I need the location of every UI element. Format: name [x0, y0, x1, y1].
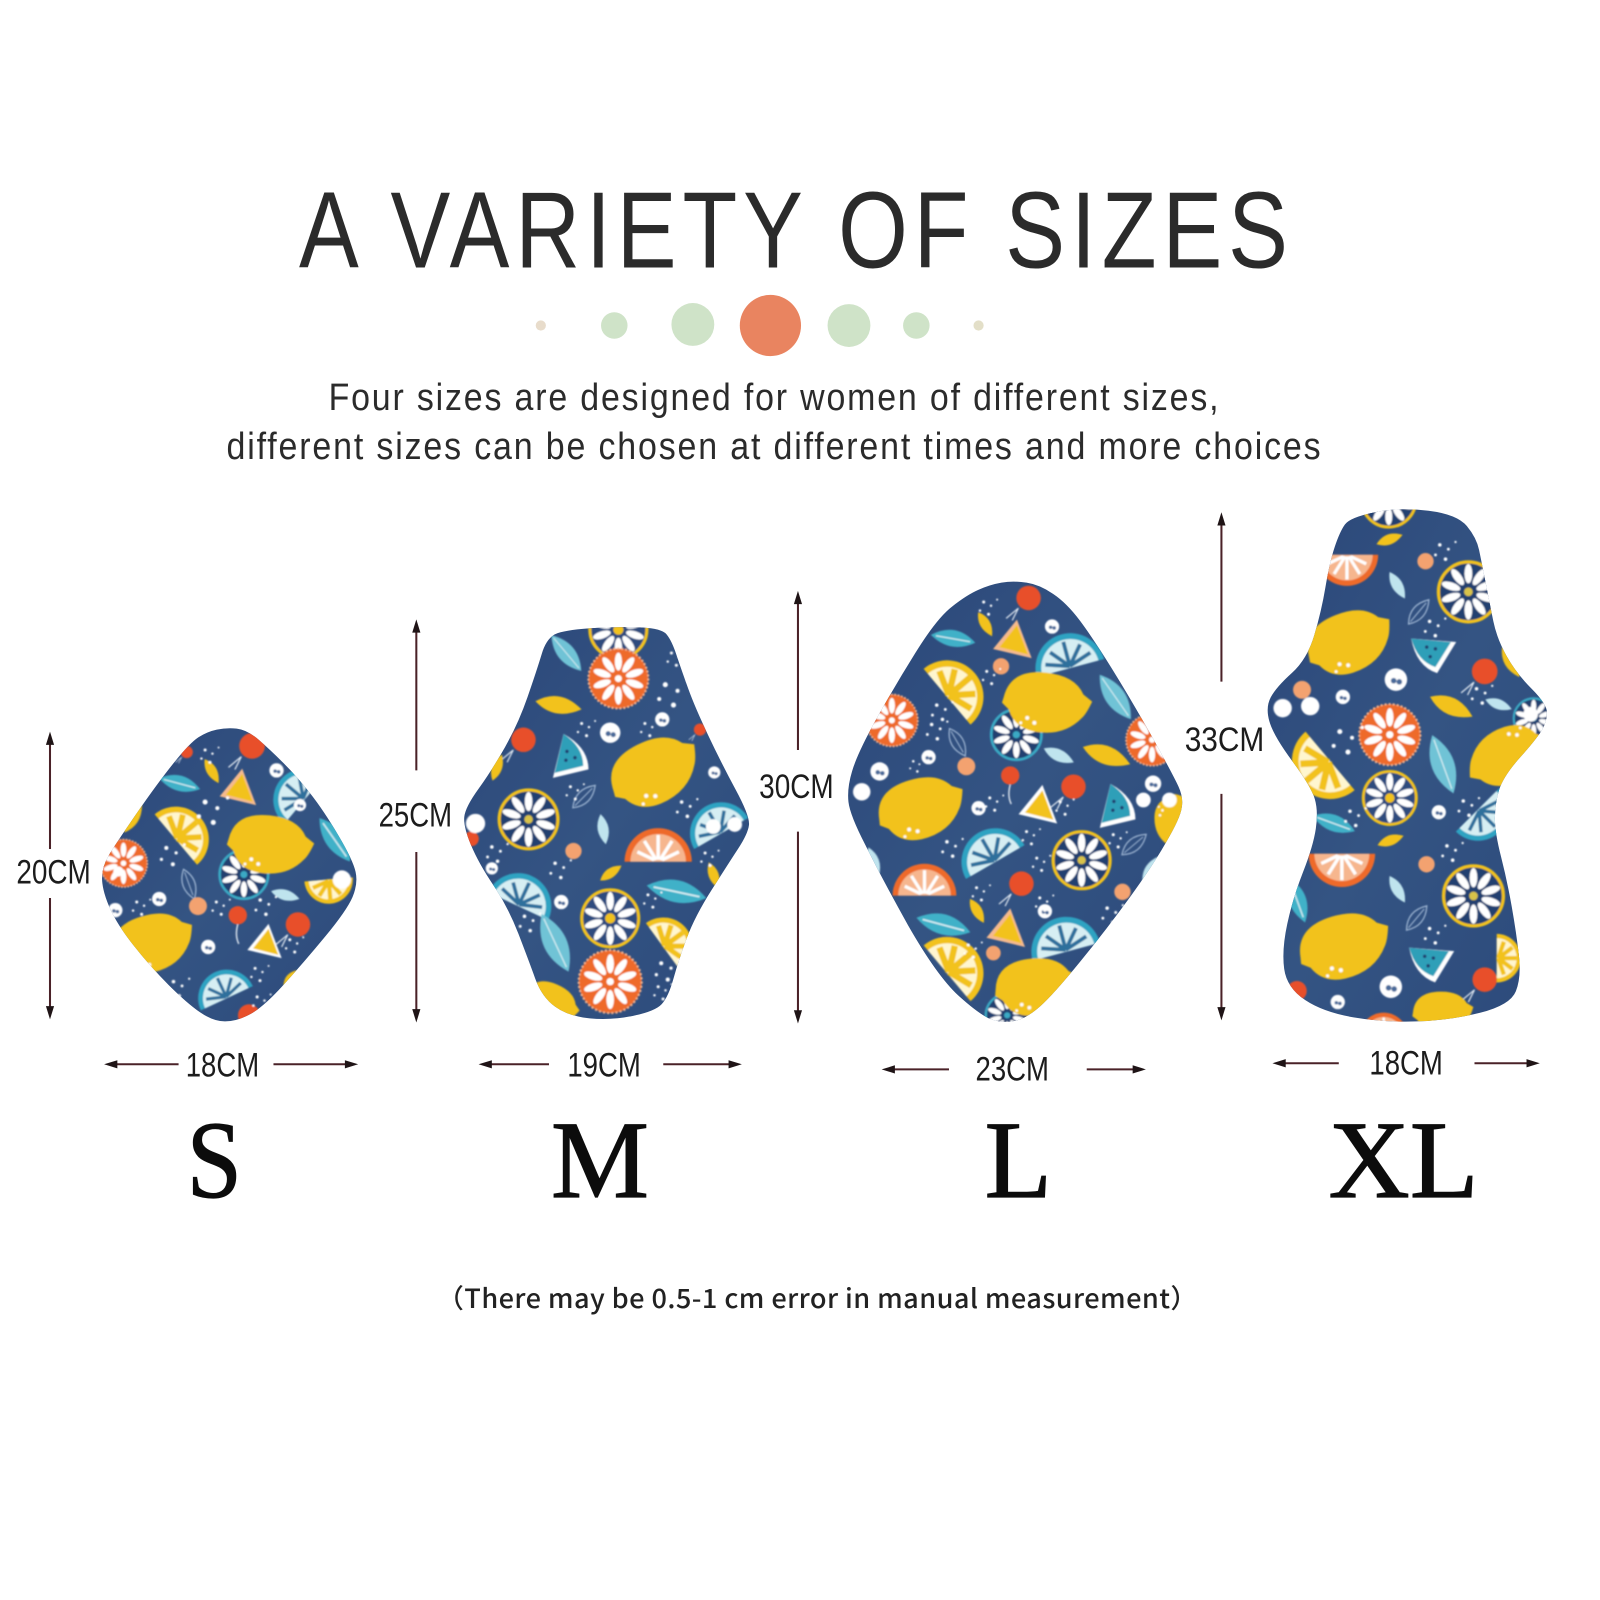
dimension: L width 23CM: 23CM	[976, 1051, 1049, 1089]
pad L outline	[848, 582, 1182, 1022]
pad: size XL	[1268, 509, 1547, 1022]
pad L fruit print	[853, 586, 1192, 1037]
dimension: L height 30CM: 30CM	[759, 768, 834, 806]
pad: size M	[464, 627, 750, 1019]
pad M outline	[464, 627, 749, 1019]
dimension: S width 18CM	[104, 1047, 358, 1085]
dimension: XL width 18CM: 18CM	[1369, 1044, 1443, 1082]
subtitle: different sizes can be chosen at different times and more choices	[227, 425, 1322, 467]
pad: size S	[100, 728, 358, 1036]
size letter L: L	[985, 1099, 1052, 1221]
dimension: XL width 18CM	[1272, 1044, 1540, 1082]
decorative dot row	[536, 295, 984, 356]
size letter S: S	[187, 1099, 242, 1221]
pad: size L	[848, 582, 1192, 1037]
dimension: S height 20CM: 20CM	[16, 854, 91, 892]
dimension: L width 23CM	[882, 1051, 1146, 1089]
size letter M: M	[551, 1099, 649, 1221]
pad XL outline	[1268, 509, 1547, 1022]
dimension: XL height 33CM	[1185, 512, 1264, 1020]
dimension: L height 30CM	[759, 591, 834, 1023]
dimension: M height 25CM	[379, 619, 452, 1022]
dimension: M width 19CM: 19CM	[567, 1047, 641, 1085]
title: A VARIETY OF SIZES	[299, 169, 1294, 290]
subtitle: Four sizes are designed for women of different sizes,	[329, 376, 1220, 418]
dimension: XL height 33CM: 33CM	[1185, 721, 1264, 759]
pad S fruit print	[100, 733, 358, 1036]
measurement note: （There may be 0.5-1 cm error in manual measurement）	[437, 1277, 1198, 1316]
dimension: S width 18CM: 18CM	[186, 1047, 259, 1085]
subtitle	[227, 376, 1322, 467]
pad M fruit print	[464, 627, 748, 1016]
dimension: M height 25CM: 25CM	[379, 797, 452, 835]
size letter XL: XL	[1329, 1099, 1479, 1221]
dimension: M width 19CM	[479, 1047, 742, 1085]
pad XL fruit print	[1272, 509, 1547, 1022]
dimension: S height 20CM	[16, 732, 91, 1019]
pad S outline	[102, 728, 356, 1021]
